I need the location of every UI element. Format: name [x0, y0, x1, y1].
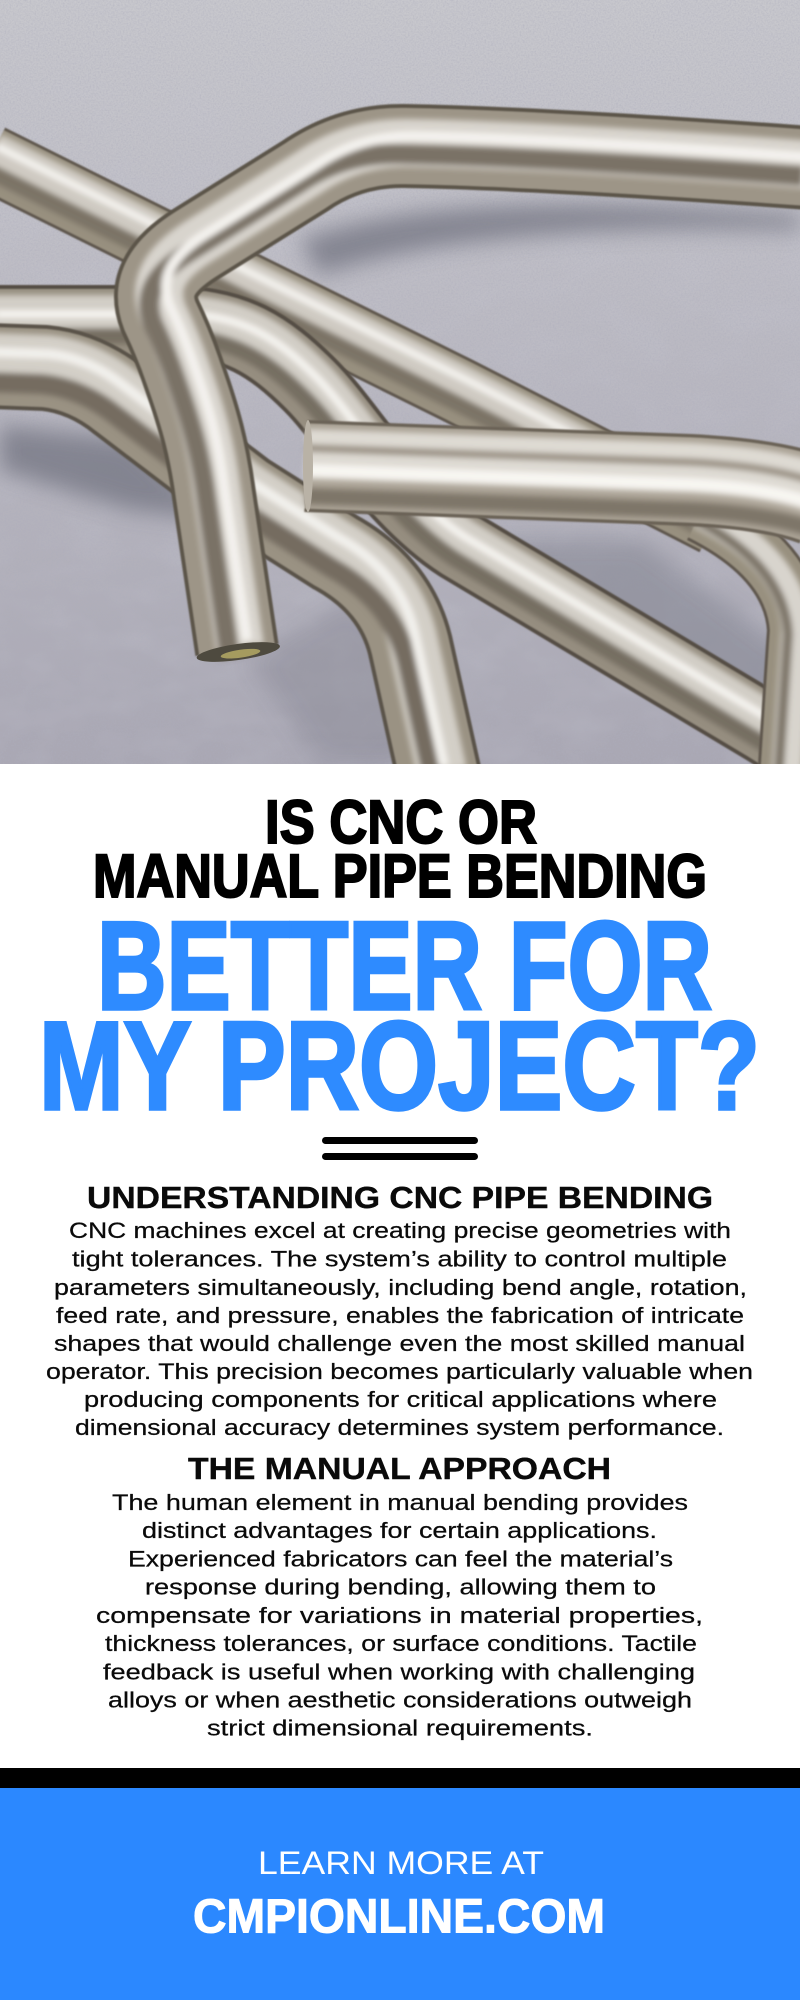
pipe: second rear tube: [0, 314, 800, 789]
body text: manual paragraph: compensate for variations in material properties,: [96, 1603, 703, 1628]
body text: manual paragraph: response during bending, allowing them to: [145, 1574, 656, 1600]
title line: is cnc or: IS CNC OR: [265, 788, 537, 856]
section: understanding cnc pipe bending: [46, 1180, 753, 1440]
body text: manual paragraph: thickness tolerances, or surface conditions. Tactile: [105, 1631, 697, 1656]
section: the manual approach: [96, 1451, 703, 1740]
body text: manual paragraph: The human element in manual bending provides: [112, 1490, 688, 1515]
heading: understanding cnc pipe bending: UNDERSTANDING CNC PIPE BENDING: [87, 1180, 713, 1215]
pipe: main top bend: [149, 136, 800, 658]
footer text: website: CMPIONLINE.COM: [193, 1890, 605, 1944]
pipe end rim: [303, 420, 313, 512]
body text: cnc paragraph: operator. This precision becomes particularly valuable when: [46, 1359, 753, 1384]
pipe: long rear diagonal: [0, 146, 721, 534]
pipe: right-edge bend and vertical tail: [692, 514, 796, 784]
body text: cnc paragraph: [46, 1218, 753, 1440]
title: [39, 788, 760, 1136]
pipe: front-left bent tube: [0, 352, 444, 796]
body text: manual paragraph: Experienced fabricators can feel the material’s: [128, 1546, 673, 1572]
body text: cnc paragraph: shapes that would challenge even the most skilled manual: [54, 1331, 745, 1356]
footer text: learn more at: LEARN MORE AT: [258, 1845, 544, 1881]
pipe shadows: [0, 204, 800, 764]
title divider bars: [322, 1137, 478, 1160]
body text: cnc paragraph: producing components for critical applications where: [84, 1387, 717, 1412]
pipe: front right tube: [306, 448, 800, 530]
body text: manual paragraph: alloys or when aesthetic considerations outweigh: [108, 1688, 692, 1712]
photo: bent steel pipes on carpet: [0, 0, 800, 796]
body text: manual paragraph: [96, 1490, 703, 1740]
title line: manual pipe bending: MANUAL PIPE BENDING: [93, 842, 707, 910]
body text: cnc paragraph: parameters simultaneously, including bend angle, rotation,: [54, 1275, 747, 1300]
body text: manual paragraph: distinct advantages for certain applications.: [142, 1518, 657, 1543]
footer panel: [0, 1788, 800, 2000]
body text: manual paragraph: feedback is useful when working with challenging: [103, 1660, 695, 1684]
body text: cnc paragraph: CNC machines excel at creating precise geometries with: [69, 1218, 731, 1243]
body text: cnc paragraph: tight tolerances. The system’s ability to control multiple: [72, 1246, 727, 1272]
carpet background: [0, 0, 800, 764]
body text: cnc paragraph: feed rate, and pressure, enables the fabrication of intricate: [56, 1303, 744, 1328]
heading: the manual approach: THE MANUAL APPROACH: [188, 1451, 611, 1486]
pipe end opening: [196, 642, 280, 662]
body text: manual paragraph: strict dimensional requirements.: [207, 1716, 593, 1740]
body text: cnc paragraph: dimensional accuracy determines system performance.: [75, 1415, 724, 1440]
footer black band: [0, 1768, 800, 1788]
